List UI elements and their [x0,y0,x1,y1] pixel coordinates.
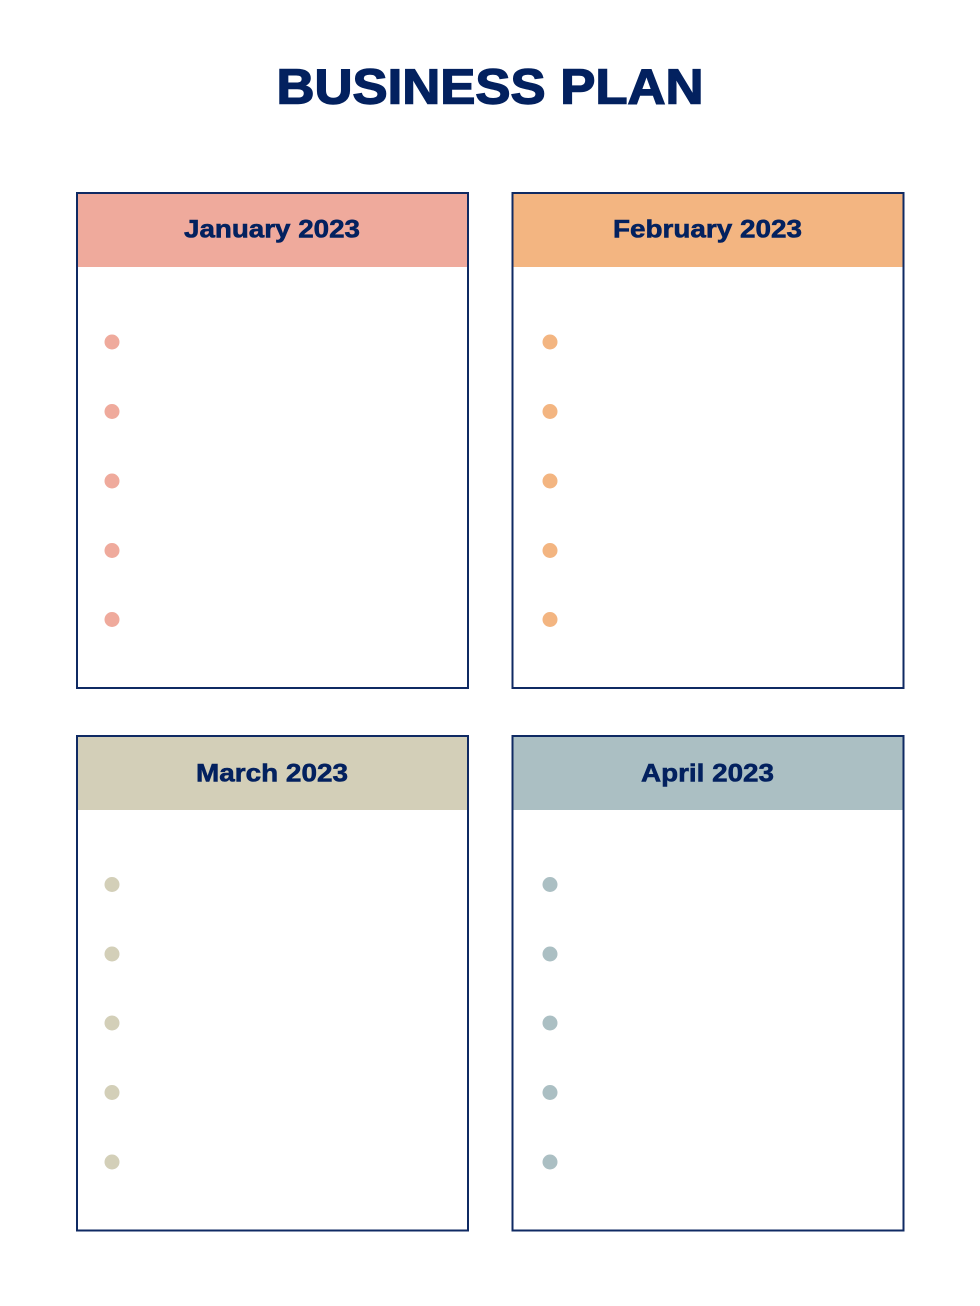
panel: March 2023 [77,736,468,1230]
panel border: April [512,736,904,1230]
bullet list: April [542,877,558,1170]
title: BUSINESS PLAN [276,60,704,114]
panel: April 2023 [512,736,904,1230]
panel: January 2023 [77,193,468,688]
panel border: January [77,193,468,688]
bullet list: March [104,877,120,1170]
bullet list: February [542,334,558,627]
heading: March 2023: March 2023 [196,760,348,788]
header band: January [77,193,468,267]
heading: February 2023: February 2023 [613,216,802,244]
panel border: March [77,736,468,1230]
header band: February [513,193,903,267]
panel: February 2023 [512,193,904,688]
header band: March [77,736,468,810]
bullet list: January [104,334,120,627]
heading: January 2023: January 2023 [184,216,360,244]
heading: April 2023: April 2023 [641,760,774,788]
header band: April [513,736,903,810]
panel border: February [512,193,904,688]
